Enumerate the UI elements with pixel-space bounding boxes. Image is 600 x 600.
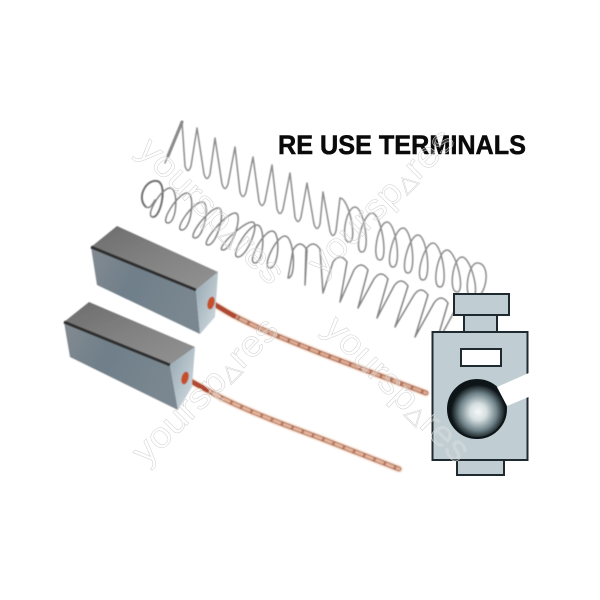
wire entry gap [497,372,531,406]
terminal ball [448,380,506,438]
spring: lower [142,181,468,347]
terminal body [432,332,528,460]
terminal foot [457,460,504,475]
terminal diagram [432,294,531,475]
brush knot [206,296,216,310]
watermark: bottom left: yoursp△res [123,308,286,472]
title: RE USE TERMINALS [278,130,526,160]
wire: lower [185,378,399,469]
terminal neck [464,315,497,332]
terminal slot [461,349,501,366]
watermark: top right: yoursp△res [299,119,462,283]
carbon brush: upper [91,226,218,334]
terminal top cap [454,294,509,315]
wire: upper [212,303,426,393]
carbon brush: lower [64,302,195,410]
watermarks [123,119,480,472]
brush knot [180,371,190,385]
watermark: bottom right: yoursp△res [316,307,480,470]
watermark: top left: yoursp△res [130,129,294,292]
spring: upper [165,122,486,298]
